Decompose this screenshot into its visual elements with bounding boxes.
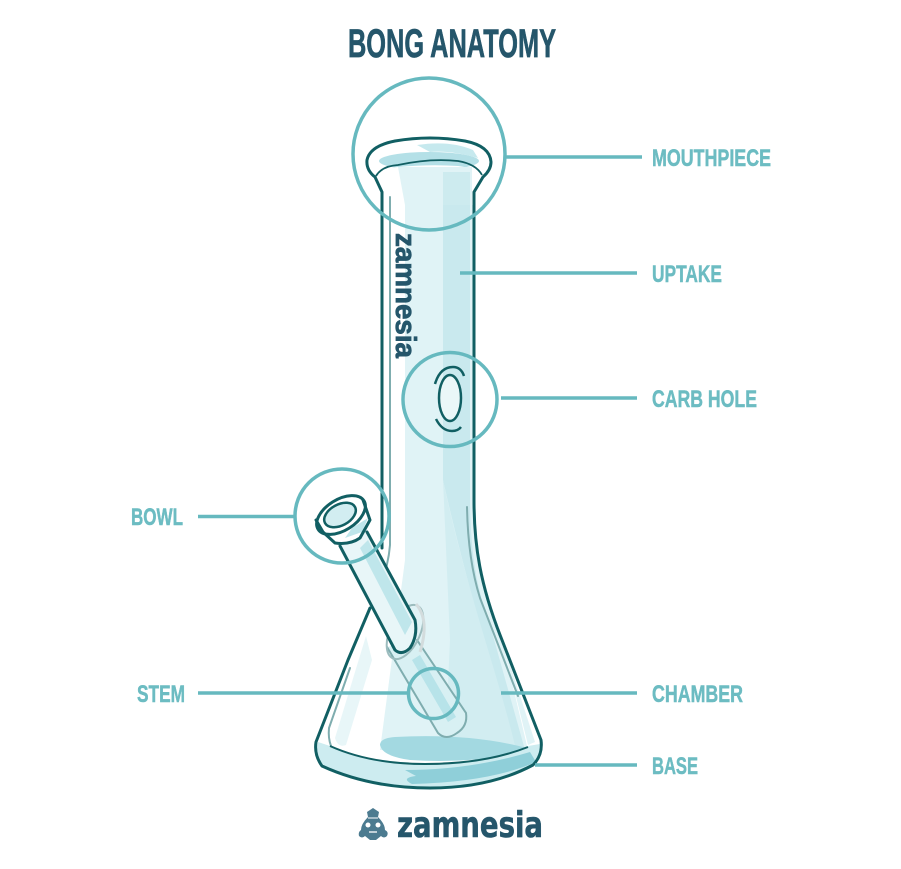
illustration: bong [310, 138, 541, 788]
base shading [405, 752, 536, 784]
logo wordmark: zamnesia [397, 805, 543, 846]
callout: carb hole [403, 352, 757, 446]
stem grommet [379, 599, 431, 665]
callout: mouthpiece: MOUTHPIECE [652, 145, 771, 172]
logo: zamnesia [359, 805, 543, 846]
glass body fill [335, 170, 535, 750]
bowl and upper stem [310, 488, 416, 653]
callout: stem: STEM [137, 681, 185, 708]
glass outline [316, 138, 541, 788]
callout: base: BASE [652, 753, 698, 780]
base fill [317, 742, 540, 787]
callout: bowl: BOWL [131, 504, 183, 531]
callout: uptake: UPTAKE [652, 261, 722, 288]
callout: chamber: CHAMBER [652, 681, 743, 708]
brand text on tube: zamnesia [389, 233, 421, 359]
stem lower section [379, 599, 466, 737]
icon: tribal mask [359, 808, 388, 840]
water [380, 736, 528, 761]
callout: bowl [131, 469, 389, 563]
callout: stem [137, 668, 458, 718]
callout: carb hole: CARB HOLE [652, 386, 757, 413]
title: BONG ANATOMY [348, 22, 556, 66]
callout: mouthpiece [353, 78, 771, 230]
carb hole [435, 367, 464, 431]
mouthpiece highlight [376, 143, 482, 205]
